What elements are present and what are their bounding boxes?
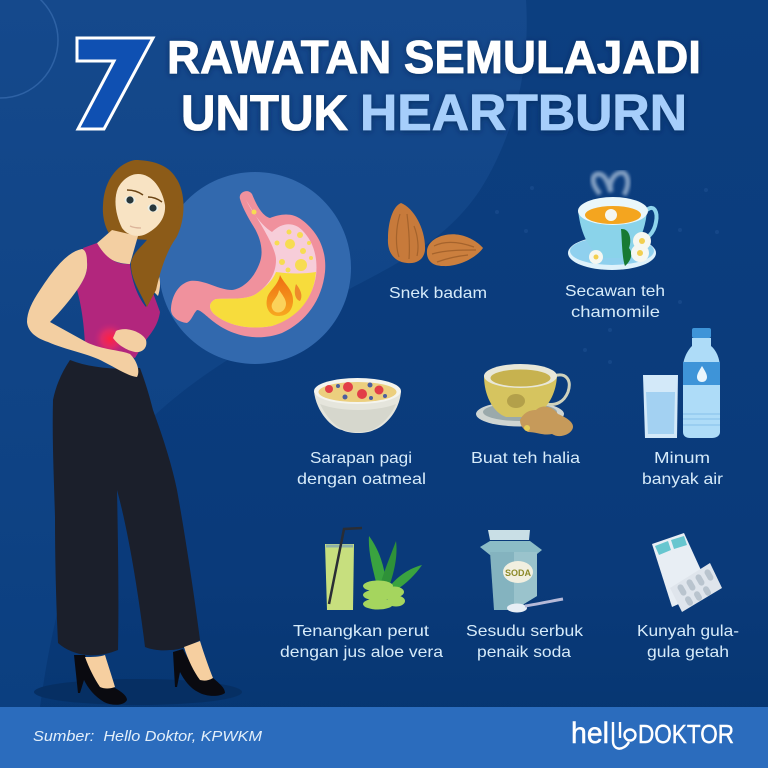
item: oatmeal bowl: [314, 378, 401, 433]
label: minum banyak air: banyak air: [642, 471, 724, 488]
title line 2: UNTUK: [181, 85, 348, 141]
item: baking soda box: [480, 530, 563, 612]
item: almonds: [388, 203, 483, 266]
label: sarapan pagi dengan oatmeal: [297, 450, 426, 488]
logo: DOKTOR: [638, 719, 734, 749]
label: kunyah gula-gula getah: [637, 623, 739, 661]
title highlight: HEARTBURN: [360, 84, 687, 141]
item: chewing gum: [652, 533, 722, 612]
logo: [571, 717, 734, 750]
label: sesudu serbuk penaik soda: [466, 623, 584, 661]
label: kunyah gula-gula getah: gula getah: [647, 644, 729, 661]
trousers: [53, 360, 200, 655]
label: minum banyak air: Minum: [654, 450, 710, 467]
item: chamomile tea: [568, 173, 657, 270]
label: kunyah gula-gula getah: Kunyah gula-: [637, 623, 739, 640]
woman figure: [27, 160, 242, 705]
label: tenangkan perut dengan jus aloe vera: [280, 623, 443, 661]
label: sarapan pagi dengan oatmeal: dengan oatmeal: [297, 471, 426, 488]
face: [115, 174, 165, 236]
magenta top: [77, 243, 160, 358]
logo: hel: [571, 717, 609, 750]
title line 1: RAWATAN SEMULAJADI: [167, 31, 701, 83]
hair back: [103, 160, 184, 240]
hair front lock: [131, 190, 181, 307]
flame: [267, 275, 301, 316]
label: tenangkan perut dengan jus aloe vera: Tenangkan perut: [293, 623, 430, 640]
item: ginger tea: [476, 364, 573, 436]
source credit: Sumber: Hello Doktor, KPWKM: [33, 728, 263, 745]
label: minum banyak air: [642, 450, 724, 488]
arm with lower hand: [27, 249, 138, 377]
glass: [643, 375, 678, 438]
eyes and features: [124, 190, 162, 228]
label: tenangkan perut dengan jus aloe vera: dengan jus aloe vera: [280, 644, 443, 661]
label: snek badam: Snek badam: [389, 285, 487, 302]
item: aloe vera juice: [325, 528, 422, 610]
title: [77, 31, 701, 141]
numeral 7: [77, 38, 153, 129]
label: buat teh halia: Buat teh halia: [471, 450, 580, 467]
label: secawan teh chamomile: Secawan teh: [565, 283, 665, 300]
label: sarapan pagi dengan oatmeal: Sarapan pagi: [310, 450, 412, 467]
right shoe: [173, 641, 225, 696]
upper hand: [113, 329, 146, 352]
label: secawan teh chamomile: [565, 283, 665, 321]
footer: [0, 707, 768, 768]
floor shadow: [34, 679, 242, 705]
label: secawan teh chamomile: chamomile: [571, 304, 660, 321]
bottle: [683, 328, 720, 438]
far arm: [152, 266, 160, 296]
item: baking soda box: SODA: [505, 568, 531, 578]
left shoe: [74, 655, 127, 705]
pain glow: [93, 322, 127, 356]
label: sesudu serbuk penaik soda: penaik soda: [477, 644, 571, 661]
stomach illustration: [159, 172, 351, 364]
item: water glass and bottle: [643, 328, 720, 438]
label: sesudu serbuk penaik soda: Sesudu serbuk: [466, 623, 584, 640]
neck: [96, 230, 138, 264]
